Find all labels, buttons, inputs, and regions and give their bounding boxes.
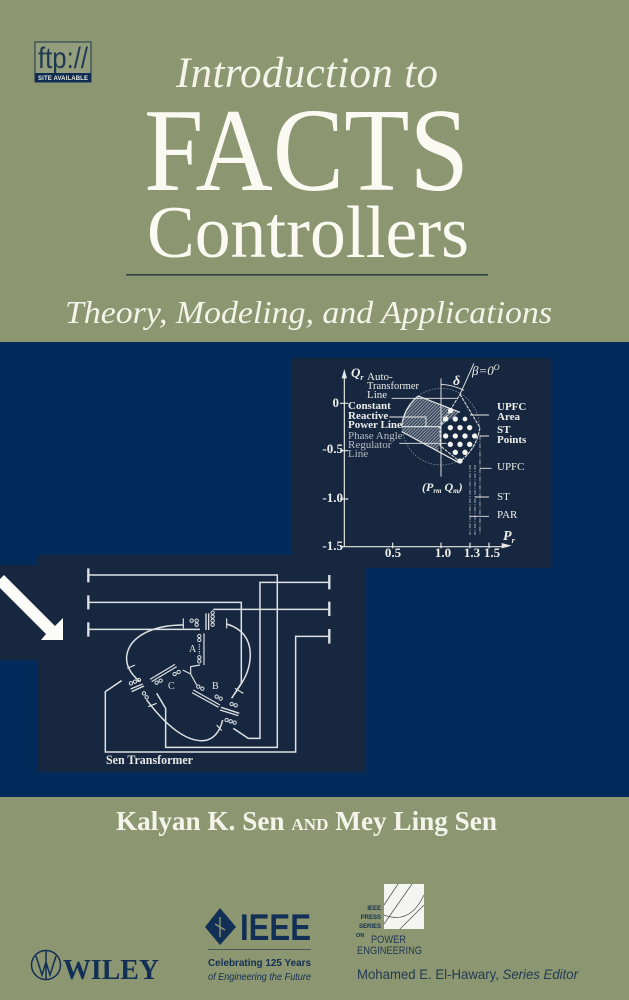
chart axes: [340, 375, 507, 548]
chart labels: Transformer: [367, 380, 419, 392]
chart labels: UPFC: [497, 461, 525, 473]
chart labels: Reactive: [348, 410, 388, 422]
dash-dot projection lines: [470, 435, 480, 535]
tick marks on loop: [127, 618, 243, 731]
chart labels: δ: [453, 374, 460, 389]
navy band: [0, 342, 629, 797]
icon: white arrow: [0, 575, 63, 640]
chart labels: Auto-: [367, 371, 393, 383]
chart labels: r: [512, 536, 516, 545]
chart labels: r: [360, 373, 364, 382]
chart labels: 0: [332, 395, 339, 410]
logo: Wiley: WILEY: [63, 954, 159, 986]
transformer labels: C: [168, 681, 175, 692]
logo: IEEE Press Series on Power Engineering: SERIES: [359, 924, 381, 930]
direction lines and guide lines: [389, 363, 492, 516]
delta winding A B C: [150, 633, 220, 707]
transformer core plates: [131, 613, 239, 716]
chart labels: Line: [367, 389, 387, 401]
chart labels: β=0: [472, 363, 494, 378]
chart labels: rm: [433, 487, 442, 495]
dotted ST region outline: [440, 394, 480, 462]
bus bars: [88, 568, 329, 644]
panel: Sen transformer diagram: [0, 555, 365, 772]
logo: ftp site available: SITE AVAILABLE: [38, 76, 88, 82]
transformer labels: B: [212, 681, 219, 692]
title rule: [126, 274, 488, 276]
chart labels: Phase Angle: [348, 430, 403, 442]
chart labels: 0.5: [385, 545, 402, 560]
chart labels: 1.3: [464, 545, 481, 560]
chart labels: Line: [348, 448, 368, 460]
chart labels: Power Line: [348, 419, 402, 431]
logo: IEEE Press Series on Power Engineering: PRESS: [361, 915, 381, 921]
chart labels: ST: [497, 424, 511, 436]
chart labels: 1.5: [484, 545, 501, 560]
chart labels: UPFC: [497, 401, 526, 413]
transformer labels: A: [189, 644, 197, 655]
axis arrowheads: [342, 369, 512, 548]
regulator loop: [127, 624, 250, 741]
logo: IEEE Press Series on Power Engineering: IEEE: [367, 906, 381, 912]
title: FACTS: FACTS: [144, 84, 469, 216]
series editor: Mohamed E. El-Hawary, Series Editor: [357, 966, 579, 982]
title: Introduction to: Introduction to: [175, 50, 438, 97]
logo: IEEE Press Series on Power Engineering: [356, 884, 424, 957]
chart labels: (P: [422, 480, 433, 494]
chart labels: Q: [442, 480, 454, 494]
chart labels: 1.0: [435, 545, 451, 560]
transformer labels: [106, 644, 219, 767]
chart labels: O: [494, 363, 500, 372]
logo: IEEE Press Series on Power Engineering: POWER: [371, 934, 406, 946]
chart labels: ): [458, 480, 463, 494]
hatched area: [402, 396, 460, 452]
logo: IEEE Press Series on Power Engineering: ON: [356, 933, 364, 939]
chart labels: Regulator: [348, 439, 392, 451]
chart labels: Q: [351, 365, 360, 380]
logo: IEEE: [205, 907, 311, 983]
authors: Kalyan K. Sen AND Mey Ling Sen: [116, 806, 497, 836]
chart labels: [322, 363, 527, 560]
chart labels: -1.0: [322, 490, 343, 505]
logo: IEEE Press Series on Power Engineering: ENGINEERING: [357, 945, 422, 957]
chart labels: PAR: [497, 509, 518, 521]
logo: Wiley: [32, 950, 159, 986]
chart labels: ST: [497, 491, 510, 503]
panel: power flow chart: [292, 358, 552, 568]
logo: IEEE: of Engineering the Future: [208, 972, 311, 983]
logo: IEEE: IEEE: [240, 907, 311, 948]
chart labels: Constant: [348, 400, 391, 412]
logo: ftp site available: ftp://: [38, 42, 89, 75]
chart labels: m: [453, 487, 459, 495]
subtitle: Theory, Modeling, and Applications: [65, 294, 552, 330]
chart labels: -0.5: [322, 441, 343, 456]
transformer labels: Sen Transformer: [106, 752, 193, 767]
chart labels: Area: [497, 411, 521, 423]
chart labels: P: [503, 529, 512, 544]
title: Controllers: Controllers: [147, 192, 469, 274]
chart labels: Points: [497, 434, 527, 446]
wiring: [88, 575, 329, 752]
logo: IEEE: Celebrating 125 Years: [208, 957, 311, 969]
ST points: [443, 408, 477, 464]
UPFC operating circle: [403, 388, 479, 465]
chart labels: -1.5: [322, 538, 343, 553]
transformer coils: [129, 611, 237, 724]
